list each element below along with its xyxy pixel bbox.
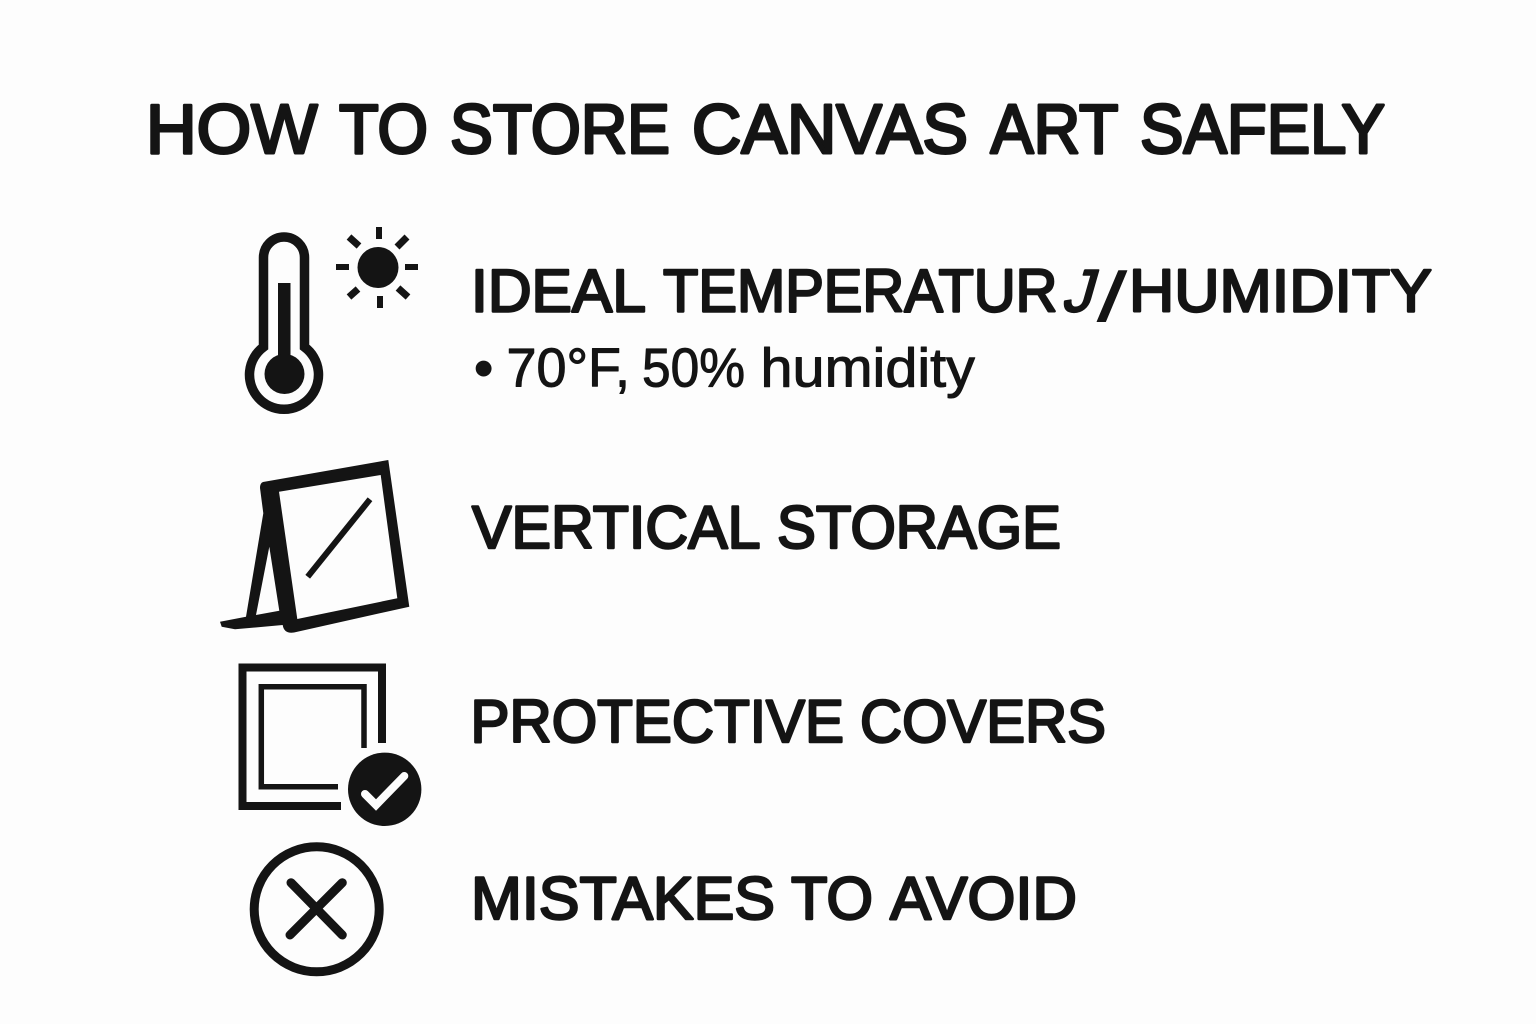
title: STORE: [450, 90, 670, 168]
title: SAFELY: [1140, 90, 1385, 168]
icon: canvas on easel: [220, 460, 409, 633]
title: TO: [339, 90, 428, 168]
heading: mistakes to avoid: MISTAKES: [471, 865, 775, 932]
text: temperature and humidity values: •: [474, 336, 493, 398]
text: temperature and humidity values: [474, 336, 976, 398]
heading: mistakes to avoid: TO: [791, 865, 873, 932]
text: temperature and humidity values: 50%: [642, 336, 745, 398]
heading: protective covers: PROTECTIVE: [470, 688, 844, 755]
title: CANVAS: [692, 90, 968, 168]
title: HOW: [146, 90, 318, 168]
icon: thermometer: [250, 237, 319, 409]
heading: mistakes to avoid: AVOID: [890, 865, 1077, 932]
heading: ideal temperature/humidity: J: [1057, 258, 1106, 324]
icon: sun: [336, 227, 418, 308]
heading: ideal temperature/humidity: HUMIDITY: [1129, 258, 1432, 324]
title: ART: [990, 90, 1118, 168]
icon: protective cover with check badge: [242, 668, 421, 826]
icon: circled X: [254, 847, 379, 972]
heading: protective covers: [470, 688, 1106, 755]
heading: ideal temperature/humidity: IDEAL: [471, 258, 646, 324]
heading: ideal temperature/humidity: TEMPERATUR: [663, 258, 1058, 324]
heading: ideal temperature/humidity: /: [1097, 258, 1128, 336]
heading: vertical storage: [472, 494, 1061, 561]
heading: ideal temperature/humidity: [471, 258, 1432, 336]
text: temperature and humidity values: humidity: [760, 336, 976, 398]
heading: protective covers: COVERS: [860, 688, 1106, 755]
heading: vertical storage: STORAGE: [777, 494, 1061, 561]
heading: mistakes to avoid: [471, 865, 1077, 932]
title: [146, 90, 1385, 168]
text: temperature and humidity values: 70°F,: [506, 336, 630, 398]
heading: vertical storage: VERTICAL: [472, 494, 761, 561]
